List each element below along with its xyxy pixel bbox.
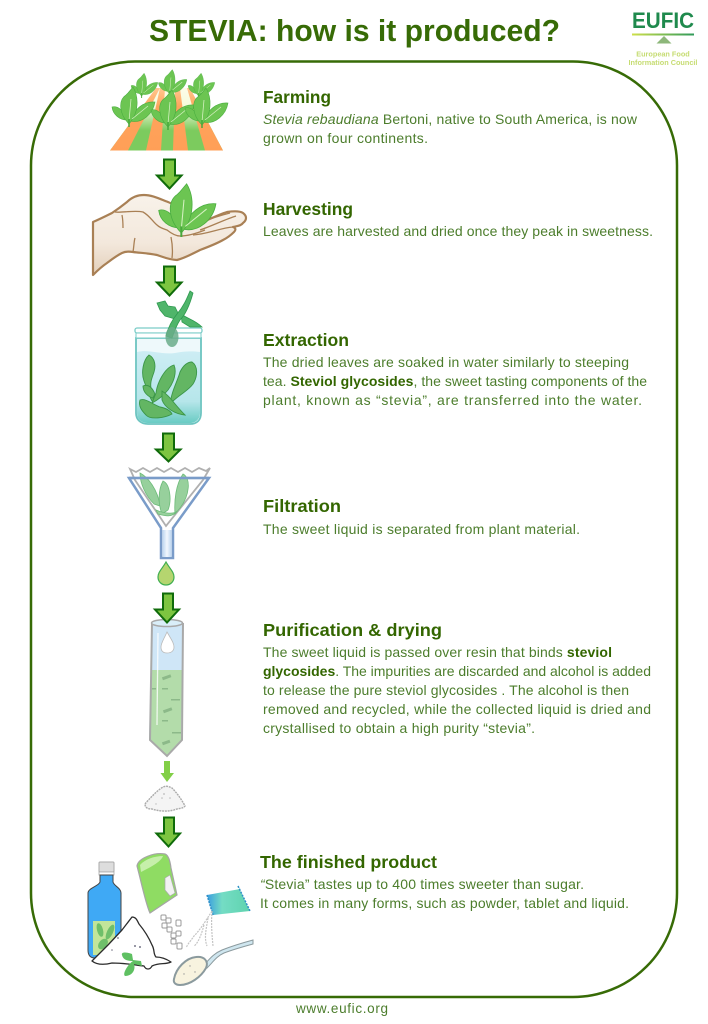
text: Farming: grown on four continents. [263, 130, 428, 146]
text: Purification: glycosides. The impurities are discarded and alcohol is added [263, 663, 651, 679]
text: Purification: The sweet liquid is passed over resin that binds steviol [263, 644, 612, 660]
arrow 4 [155, 594, 179, 622]
heading: Filtration: Filtration [263, 496, 341, 516]
logo: EUFIC: Information Council [629, 58, 697, 67]
icon: spoon [174, 940, 253, 985]
arrow: tube to powder [160, 761, 174, 782]
logo: EUFIC: EUFIC [632, 8, 694, 33]
icon: sugar pile [92, 917, 171, 976]
text: Extraction: plant, known as “stevia”, are transferred into the water. [263, 392, 642, 408]
text: Farming [263, 111, 638, 146]
arrow 2 [157, 266, 182, 296]
heading: Farming: Farming [263, 87, 331, 107]
heading: Purification & drying: Purification & drying [263, 620, 442, 640]
text: Purification [263, 644, 651, 736]
text: The finished product [260, 876, 629, 911]
text: Purification: removed and recycled, while the collected liquid is dried and [263, 701, 651, 717]
heading: The finished product: The finished product [260, 852, 437, 872]
icon: finished products [88, 854, 253, 985]
text: Filtration: The sweet liquid is separated from plant material. [263, 521, 580, 537]
text: Purification: to release the pure steviol glycosides . The alcohol is then [263, 682, 629, 698]
text: Purification: crystallised to obtain a high purity “stevia”. [263, 720, 535, 736]
icon: powder pile [145, 786, 185, 811]
icon: sachet [187, 886, 250, 947]
heading: Extraction: Extraction [263, 330, 349, 350]
arrow 1 [157, 160, 182, 188]
logo: EUFIC: European Food [636, 50, 690, 58]
website footer: www.eufic.org [295, 1001, 388, 1016]
icon: funnel with filter [129, 468, 210, 558]
icon: hand with plant [93, 184, 246, 275]
icon: resin tube [149, 620, 183, 756]
icon: farm field [110, 70, 228, 150]
arrow 5 [156, 818, 180, 846]
text: Harvesting: Leaves are harvested and dried once they peak in sweetness. [263, 223, 653, 239]
text: Farming: Stevia rebaudiana Bertoni, native to South America, is now [263, 111, 638, 127]
text: The finished product: “Stevia” tastes up to 400 times sweeter than sugar. [260, 876, 584, 892]
icon: tablets [161, 915, 182, 949]
heading: Harvesting: Harvesting [263, 199, 353, 219]
logo: EUFIC [629, 8, 697, 67]
icon: liquid drop [158, 562, 174, 585]
icon: shaker [137, 854, 177, 913]
title: STEVIA: how is it produced? [149, 13, 560, 48]
text: Extraction [263, 354, 647, 408]
text: Extraction: The dried leaves are soaked in water similarly to steeping [263, 354, 629, 370]
text: Extraction: tea. Steviol glycosides, the sweet tasting components of the [263, 373, 647, 389]
icon: jar with leaves [135, 291, 202, 424]
icon: bottle [88, 862, 121, 958]
text: The finished product: It comes in many forms, such as powder, tablet and liquid. [260, 895, 629, 911]
arrow 3 [156, 434, 180, 462]
